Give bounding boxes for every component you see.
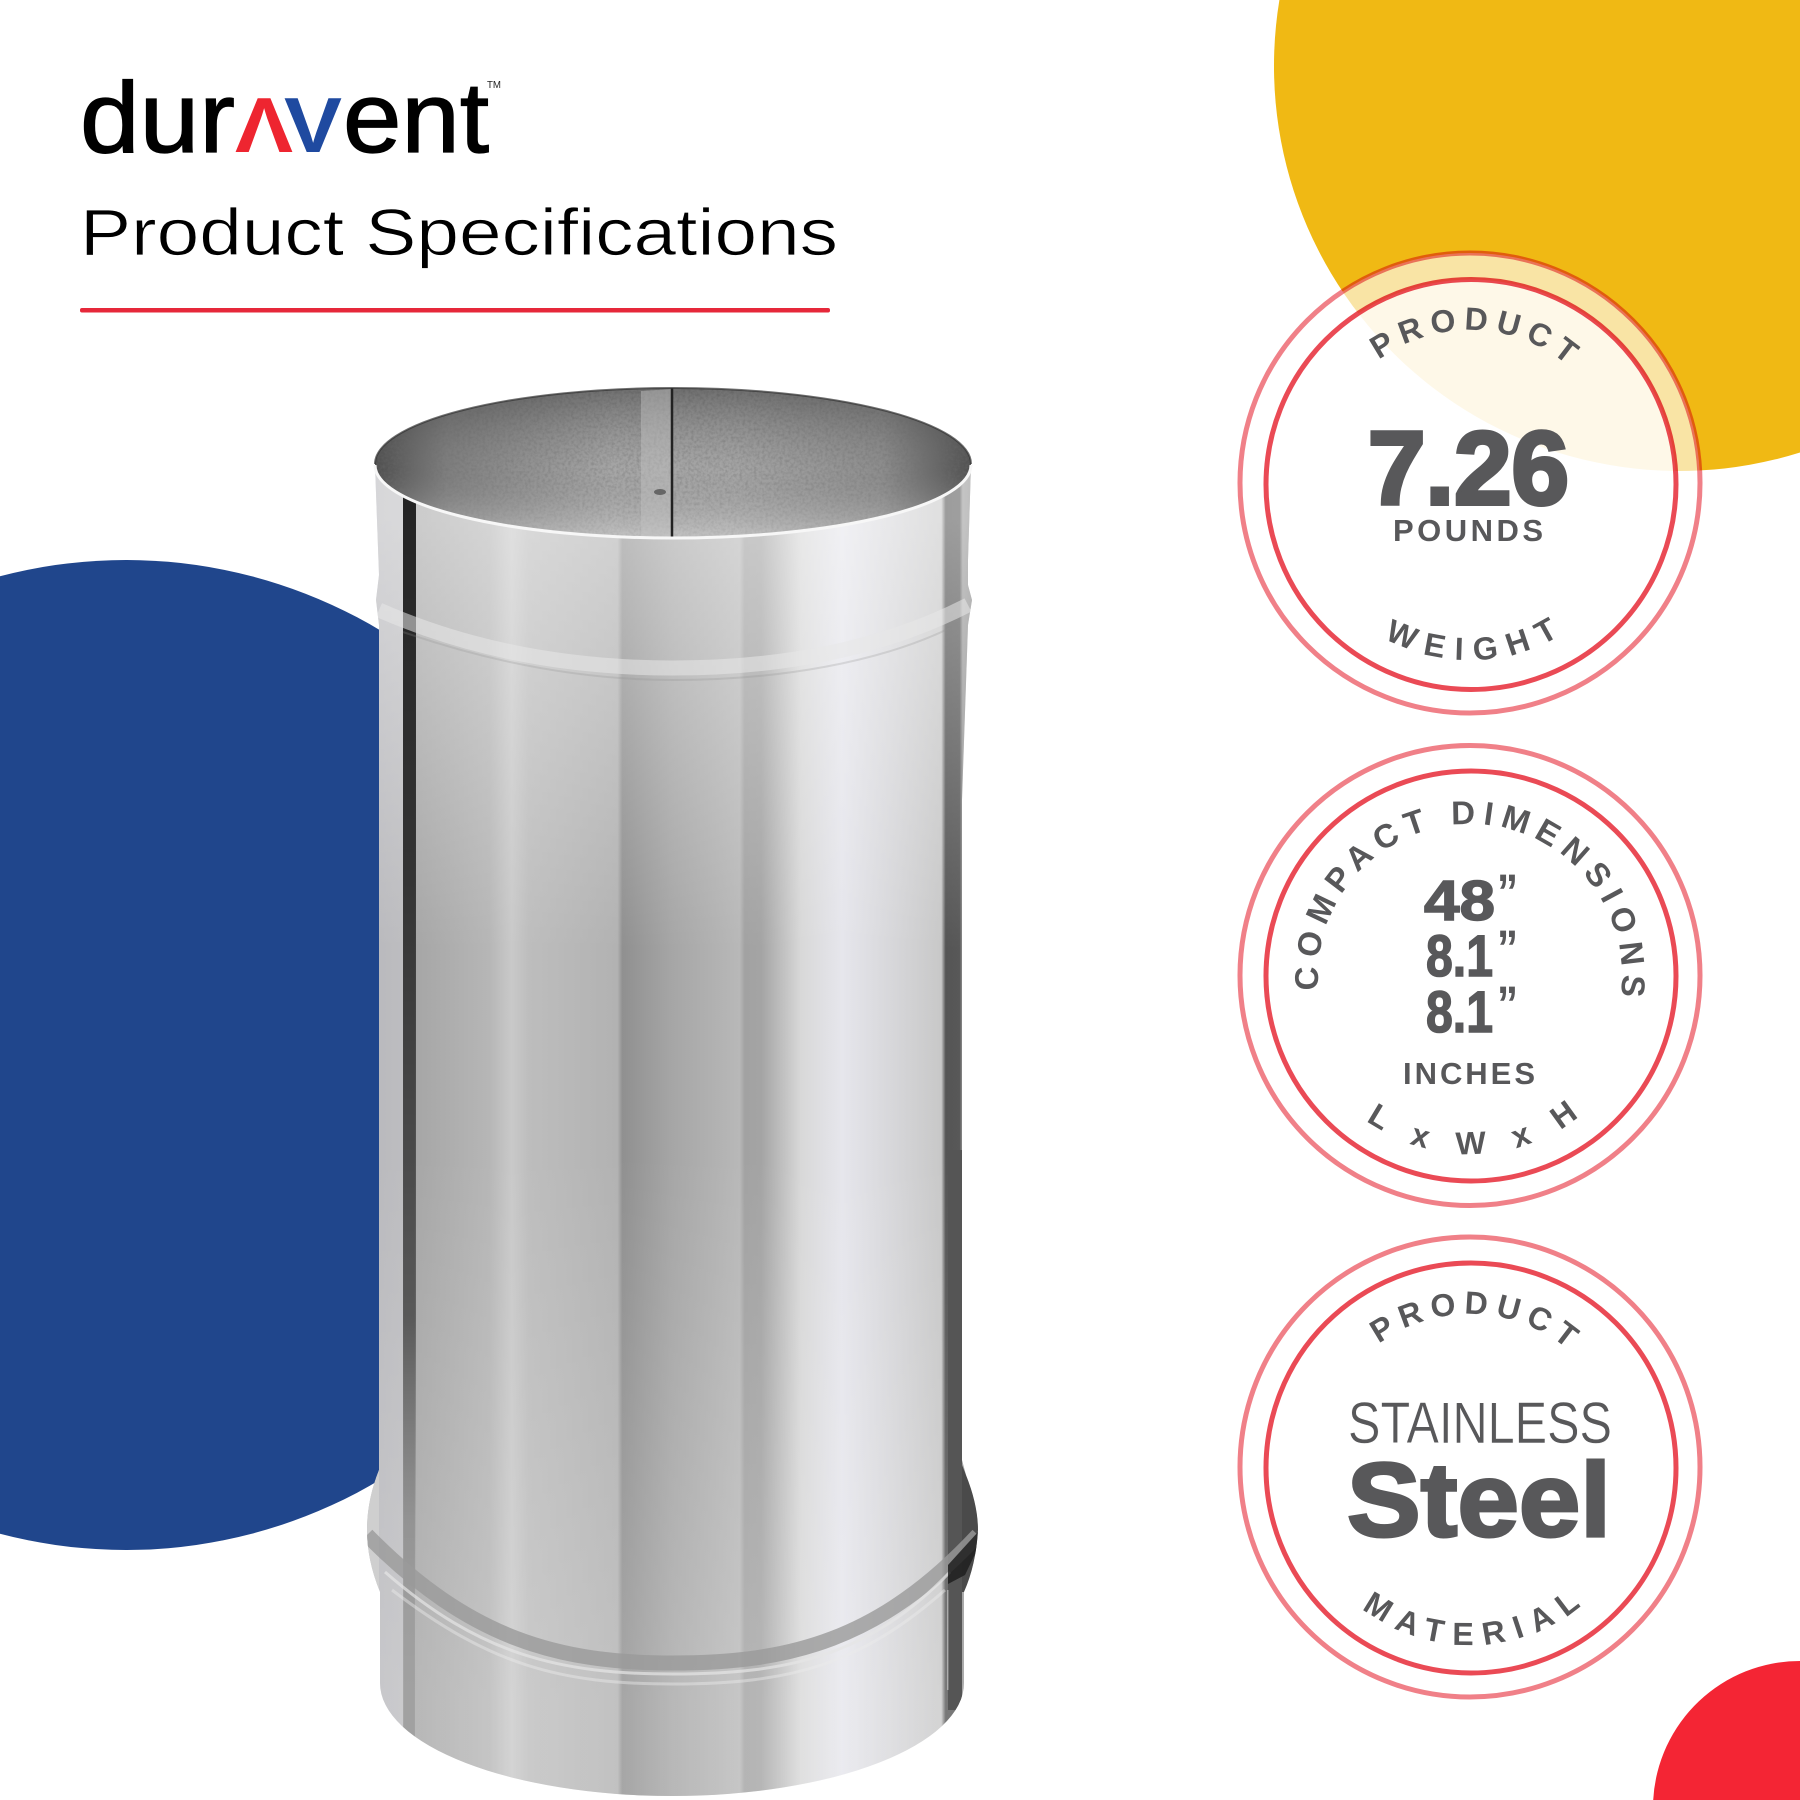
- logo: duravent: dur: [80, 62, 235, 174]
- logo: duravent: TM: [487, 80, 501, 91]
- dimension values: 8.1: [1426, 924, 1493, 989]
- curved label: PRODUCT: PRODUCT: [1369, 1292, 1580, 1344]
- dimension values: 8.1: [1426, 980, 1493, 1045]
- pipe body: [360, 440, 990, 1800]
- badge: product weight: [1238, 250, 1702, 716]
- curved label: L x W x H: L x W x H: [1368, 1100, 1578, 1154]
- logo: duravent: [80, 62, 501, 174]
- badge rings: [1240, 1237, 1700, 1697]
- dimension values: [1424, 864, 1518, 1045]
- dimension values: ”: [1497, 920, 1518, 976]
- unit: POUNDS: POUNDS: [1393, 513, 1543, 548]
- red corner circle: [1653, 1661, 1800, 1800]
- curved label: COMPACT DIMENSIONS: COMPACT DIMENSIONS: [1294, 802, 1645, 996]
- badge rings: [1240, 746, 1700, 1206]
- badge: product material: [1238, 1234, 1702, 1700]
- value: 7.26: 7.26: [1368, 411, 1569, 527]
- pipe front rim highlight: [375, 465, 971, 538]
- dimension values: ”: [1497, 976, 1518, 1032]
- badge fill over yellow: [1240, 253, 1700, 713]
- curved label: MATERIAL: MATERIAL: [1363, 1592, 1580, 1646]
- material line: Steel: Steel: [1347, 1442, 1611, 1559]
- pipe interior: [375, 388, 971, 540]
- dimension values: ”: [1497, 864, 1518, 920]
- logo: duravent: V: [284, 81, 342, 169]
- logo: duravent: Λ: [235, 81, 293, 169]
- curved label: PRODUCT: PRODUCT: [1369, 308, 1580, 360]
- badge: compact dimensions: [1238, 743, 1702, 1208]
- curved label: WEIGHT: WEIGHT: [1389, 616, 1553, 660]
- heading underline: [80, 308, 830, 312]
- yellow background circle: [1274, 0, 1800, 471]
- dimension values: 48: [1424, 869, 1495, 933]
- material line: STAINLESS: STAINLESS: [1348, 1391, 1612, 1456]
- heading: Product Specifications: Product Specifications: [80, 195, 838, 269]
- blue background circle: [0, 560, 621, 1550]
- unit: INCHES: INCHES: [1403, 1056, 1535, 1091]
- logo: duravent: ent: [343, 62, 489, 174]
- product photo: stainless steel pipe: [360, 388, 990, 1800]
- badge rings: [1240, 253, 1700, 713]
